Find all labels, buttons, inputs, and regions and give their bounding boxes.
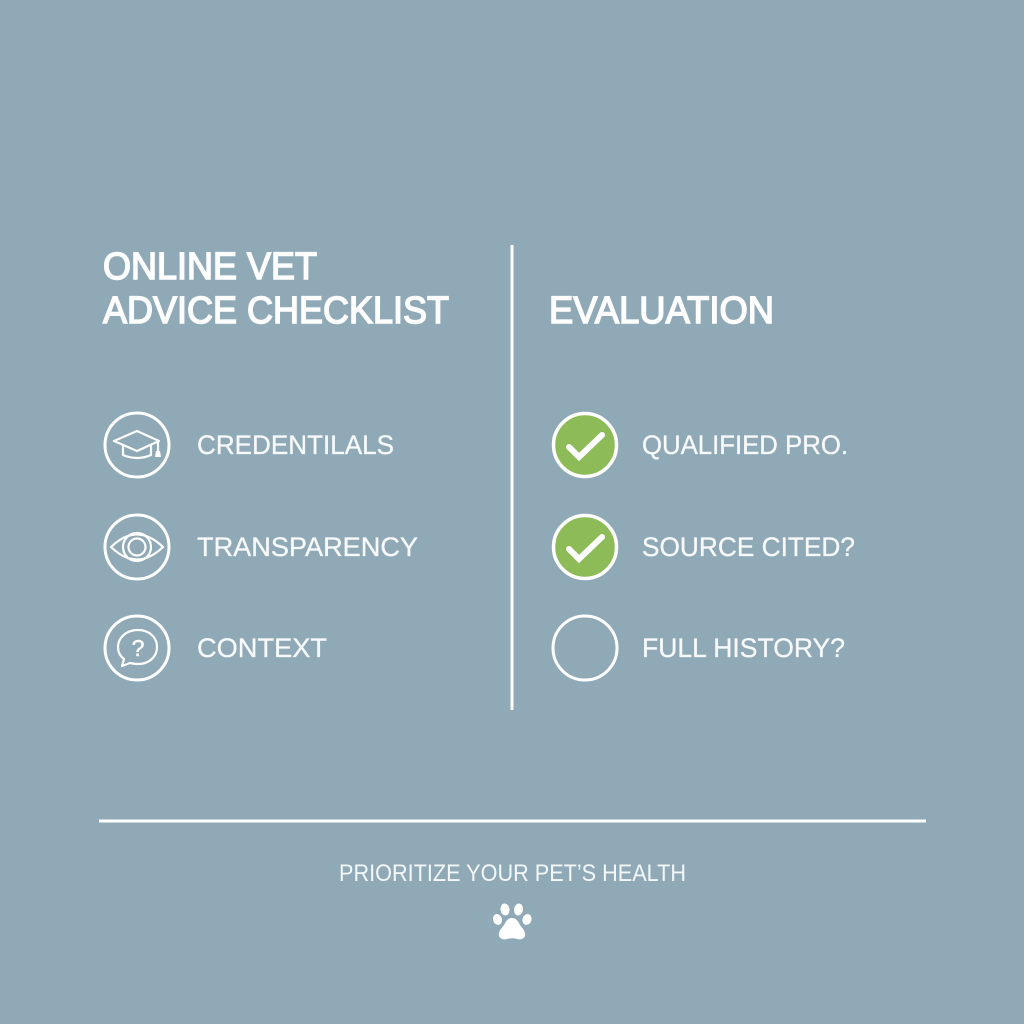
label: qualified pro: QUALIFIED PRO.	[642, 430, 848, 460]
panel: checklist items	[105, 413, 418, 680]
label: source cited: SOURCE CITED?	[642, 532, 855, 562]
icon: question speech bubble	[105, 616, 169, 680]
icon: empty circle	[553, 616, 617, 680]
title: ONLINE VET	[103, 246, 317, 288]
icon: question speech bubble: ?	[132, 635, 144, 661]
icon: green check 1	[554, 414, 616, 476]
title	[103, 246, 449, 332]
icon: green check 2	[554, 516, 616, 578]
label: credentials: CREDENTILALS	[197, 430, 394, 460]
title: ADVICE CHECKLIST	[103, 290, 449, 332]
label: full history: FULL HISTORY?	[642, 633, 845, 663]
label: context: CONTEXT	[197, 633, 327, 663]
footer text: PRIORITIZE YOUR PET’S HEALTH	[339, 860, 686, 887]
footer divider	[99, 820, 926, 822]
heading: evaluation: EVALUATION	[549, 290, 774, 332]
icon: graduation cap	[105, 413, 169, 477]
icon: paw	[492, 903, 533, 939]
icon: eye	[105, 515, 169, 579]
column divider	[510, 245, 514, 710]
label: transparency: TRANSPARENCY	[197, 532, 418, 562]
panel: evaluation items	[553, 414, 855, 680]
